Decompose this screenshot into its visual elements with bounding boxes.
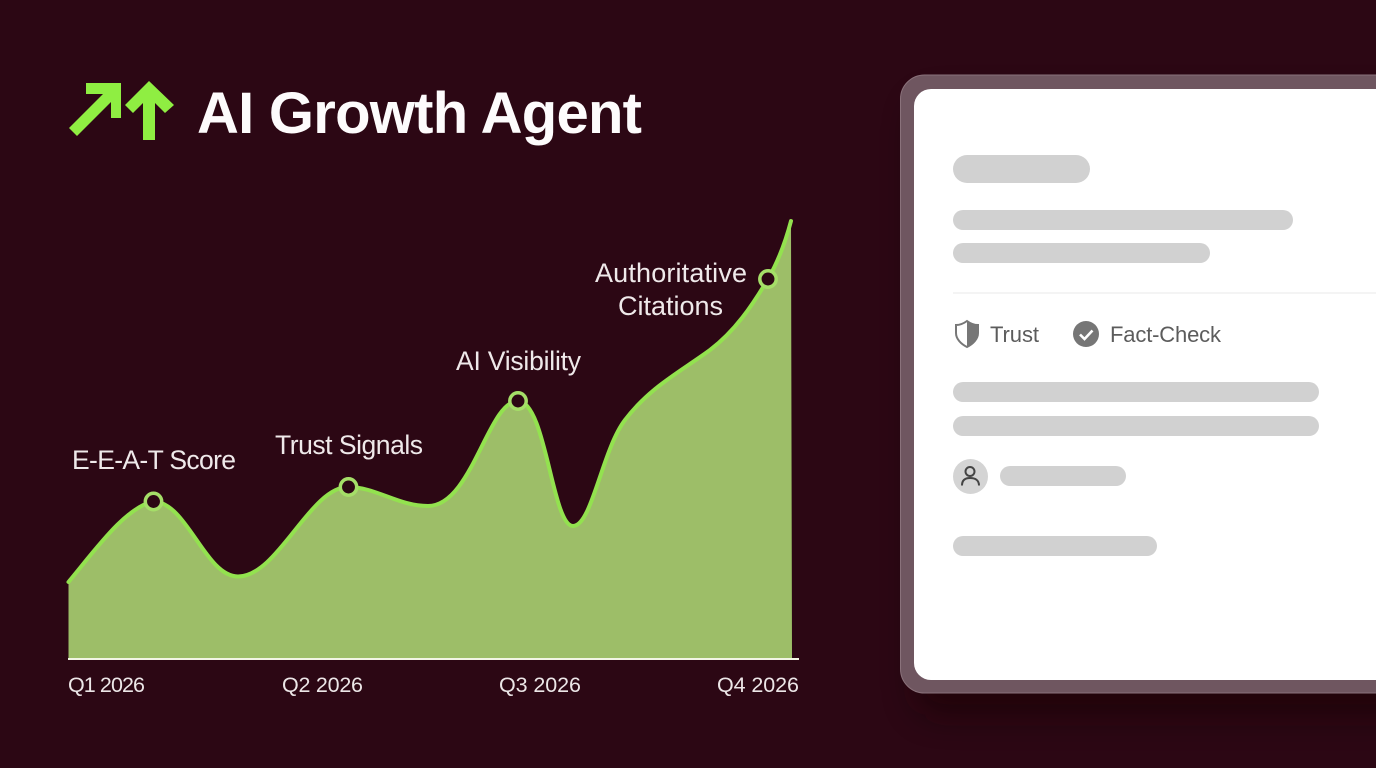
label: AI Visibility: AI Visibility [456,346,582,376]
marker: AI Visibility [510,393,526,409]
chart area fill [68,221,792,659]
chart trend line [68,221,791,582]
placeholder: line 3 [953,382,1319,402]
icon: author avatar [953,459,988,494]
marker: Authoritative Citations [760,271,776,287]
label: Authoritative Citations [595,258,747,321]
marker: Trust Signals [340,479,357,495]
placeholder: author name [1000,466,1126,486]
label: E-E-A-T Score: E-E-A-T Score [72,445,236,475]
label: Authoritative Citations: Citations [618,291,723,321]
x axis labels: Q1 2026 [68,673,145,697]
label: Authoritative Citations: Authoritative [595,258,747,288]
x axis labels: Q3 2026 [499,673,581,697]
placeholder: line 2 [953,243,1210,263]
logo: double growth arrows [69,81,174,140]
placeholder: line 4 [953,416,1319,436]
icon: shield [956,321,978,347]
panel sheet [914,89,1376,680]
x axis labels: Q2 2026 [282,673,363,697]
x axis labels: Q4 2026 [717,673,799,697]
panel shadow [915,100,1376,715]
icon: check badge [1073,321,1099,347]
placeholder: heading [953,155,1090,183]
x axis baseline [68,658,799,660]
area chart [68,221,799,659]
x axis labels [68,673,799,697]
marker: E-E-A-T Score [145,493,162,510]
placeholder: footer line [953,536,1157,556]
panel: document preview [900,75,1376,715]
label: Trust Signals: Trust Signals [275,430,423,460]
badge label: Fact-Check: Fact-Check [1110,322,1222,347]
panel frame [900,75,1376,693]
placeholder: line 1 [953,210,1293,230]
badge label: Trust: Trust [990,322,1039,347]
title: AI Growth Agent [197,81,642,146]
